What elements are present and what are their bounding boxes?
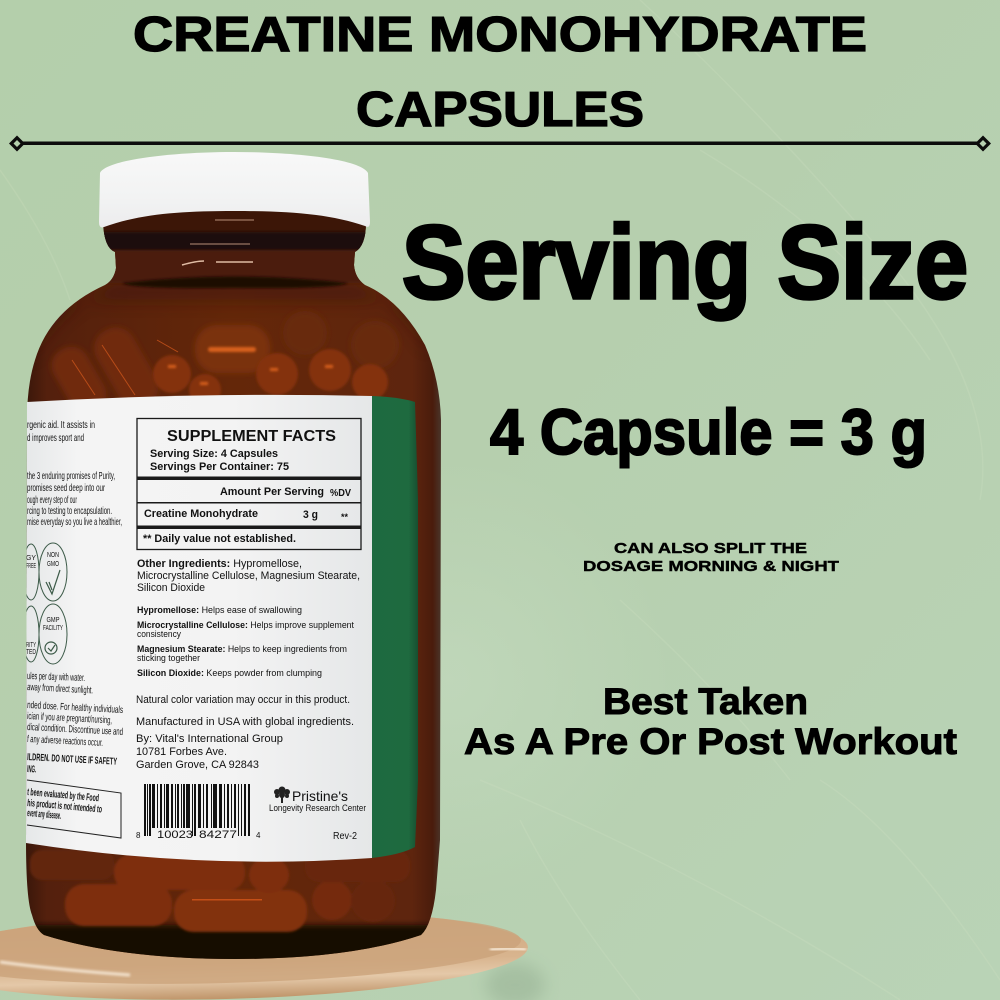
barcode: 84277 bbox=[199, 829, 237, 841]
other ingredients: Other Ingredients: Hypromellose, bbox=[137, 558, 302, 570]
product description: the 3 enduring promises of Purity, bbox=[27, 471, 115, 482]
ingredient purposes: Microcrystalline Cellulose: Helps improve supplement bbox=[137, 620, 354, 630]
label left column: GY bbox=[26, 555, 36, 562]
neck bbox=[103, 211, 366, 237]
icon: tree bbox=[274, 786, 290, 803]
product description: d improves sport and bbox=[27, 433, 84, 444]
supplement facts panel: SUPPLEMENT FACTS bbox=[167, 428, 336, 445]
supplement facts panel: Creatine Monohydrate bbox=[144, 508, 258, 520]
white cap bbox=[99, 152, 370, 227]
dosage: 4 capsule = 3 g: 4 Capsule = 3 g bbox=[490, 396, 927, 468]
directions and warnings: ING. bbox=[27, 764, 37, 775]
ingredient purposes: consistency bbox=[137, 629, 181, 639]
supplement facts panel: ** bbox=[341, 512, 348, 522]
note: split dosage: CAN ALSO SPLIT THE bbox=[614, 540, 807, 557]
revision code: Rev-2 bbox=[333, 831, 357, 842]
note: best taken bbox=[464, 681, 957, 762]
product description bbox=[27, 420, 122, 528]
ingredient purposes: Hypromellose: Helps ease of swallowing bbox=[137, 605, 302, 615]
manufacturer information: Garden Grove, CA 92843 bbox=[136, 759, 259, 771]
manufacturer information: By: Vital's International Group bbox=[136, 733, 283, 745]
supplement facts panel: Serving Size: 4 Capsules bbox=[150, 448, 278, 460]
title: CAPSULES bbox=[356, 83, 644, 137]
manufacturer information: Manufactured in USA with global ingredients. bbox=[136, 716, 354, 728]
Pristine's logo: Pristine's bbox=[292, 788, 348, 804]
ingredient purposes: sticking together bbox=[137, 653, 200, 663]
product description: promises seed deep into our bbox=[27, 483, 105, 494]
ingredient purposes bbox=[137, 605, 354, 678]
label left column bbox=[23, 420, 123, 838]
product description: mise everyday so you live a healthier, bbox=[27, 517, 122, 528]
title: CREATINE MONOHYDRATE bbox=[133, 8, 867, 62]
label left column: FREE bbox=[26, 563, 36, 570]
title bbox=[133, 8, 867, 137]
directions and warnings: away from direct sunlight. bbox=[27, 682, 93, 696]
manufacturer information bbox=[136, 694, 354, 771]
product description: rcing to testing to encapsulation. bbox=[27, 506, 112, 517]
product description: rgenic aid. It assists in bbox=[27, 420, 95, 431]
barcode: 10023 bbox=[157, 829, 193, 841]
note: split dosage bbox=[583, 540, 839, 575]
manufacturer information: 10781 Forbes Ave. bbox=[136, 746, 227, 758]
product description: ough every step of our bbox=[27, 495, 77, 506]
label left column: GMO bbox=[47, 561, 59, 568]
wooden plate bbox=[0, 903, 545, 1000]
directions and warnings: dical condition. Discontinue use and bbox=[27, 722, 123, 738]
label left column: NON bbox=[47, 552, 59, 559]
other ingredients: Microcrystalline Cellulose, Magnesium Stearate, bbox=[137, 570, 360, 582]
supplement facts panel: ** Daily value not established. bbox=[143, 533, 296, 545]
directions and warnings: ician if you are pregnant/nursing, bbox=[27, 711, 112, 726]
note: split dosage: DOSAGE MORNING & NIGHT bbox=[583, 558, 839, 575]
label left column: GMP bbox=[46, 617, 60, 624]
FDA disclaimer box: t been evaluated by the Food bbox=[27, 787, 99, 804]
note: best taken: As A Pre Or Post Workout bbox=[464, 721, 957, 762]
ingredient purposes: Magnesium Stearate: Helps to keep ingredients from bbox=[137, 644, 347, 654]
directions and warnings: f any adverse reactions occur. bbox=[27, 734, 103, 749]
icons: certification badges bbox=[23, 543, 67, 664]
label left column: TED bbox=[26, 649, 36, 656]
capsules inside bottle bbox=[26, 152, 429, 959]
directions and warnings: ILDREN. DO NOT USE IF SAFETY bbox=[27, 752, 117, 768]
Pristine's logo: Longevity Research Center bbox=[269, 803, 366, 814]
directions and warnings: nded dose. For healthy individuals bbox=[27, 700, 123, 716]
barcode: 8 bbox=[136, 831, 141, 840]
divider bbox=[9, 136, 991, 152]
white label bbox=[26, 395, 372, 862]
supplement facts panel bbox=[137, 418, 361, 550]
back label green panel bbox=[371, 396, 418, 858]
supplement facts panel: 3 g bbox=[303, 509, 318, 521]
ingredient purposes: Silicon Dioxide: Keeps powder from clumping bbox=[137, 668, 322, 678]
supplement facts panel: Servings Per Container: 75 bbox=[150, 461, 289, 473]
FDA disclaimer box bbox=[27, 780, 121, 838]
manufacturer information: Natural color variation may occur in this product. bbox=[136, 694, 350, 706]
other ingredients bbox=[137, 558, 360, 594]
Pristine's logo bbox=[269, 786, 366, 814]
supplement facts panel: Amount Per Serving bbox=[220, 486, 324, 498]
FDA disclaimer box: event any disease. bbox=[27, 808, 62, 822]
supplement facts panel: %DV bbox=[330, 488, 351, 499]
label left column: FACILITY bbox=[43, 625, 63, 632]
FDA disclaimer box: his product is not intended to bbox=[27, 798, 102, 816]
amber glass body bbox=[26, 205, 441, 959]
directions and warnings bbox=[27, 671, 123, 775]
label left column: RITY bbox=[26, 642, 36, 649]
note: best taken: Best Taken bbox=[603, 681, 808, 722]
directions and warnings: ules per day with water. bbox=[27, 671, 85, 684]
barcode: 4 bbox=[256, 831, 261, 840]
bottle bbox=[26, 152, 441, 959]
other ingredients: Silicon Dioxide bbox=[137, 582, 205, 594]
barcode bbox=[136, 784, 261, 841]
